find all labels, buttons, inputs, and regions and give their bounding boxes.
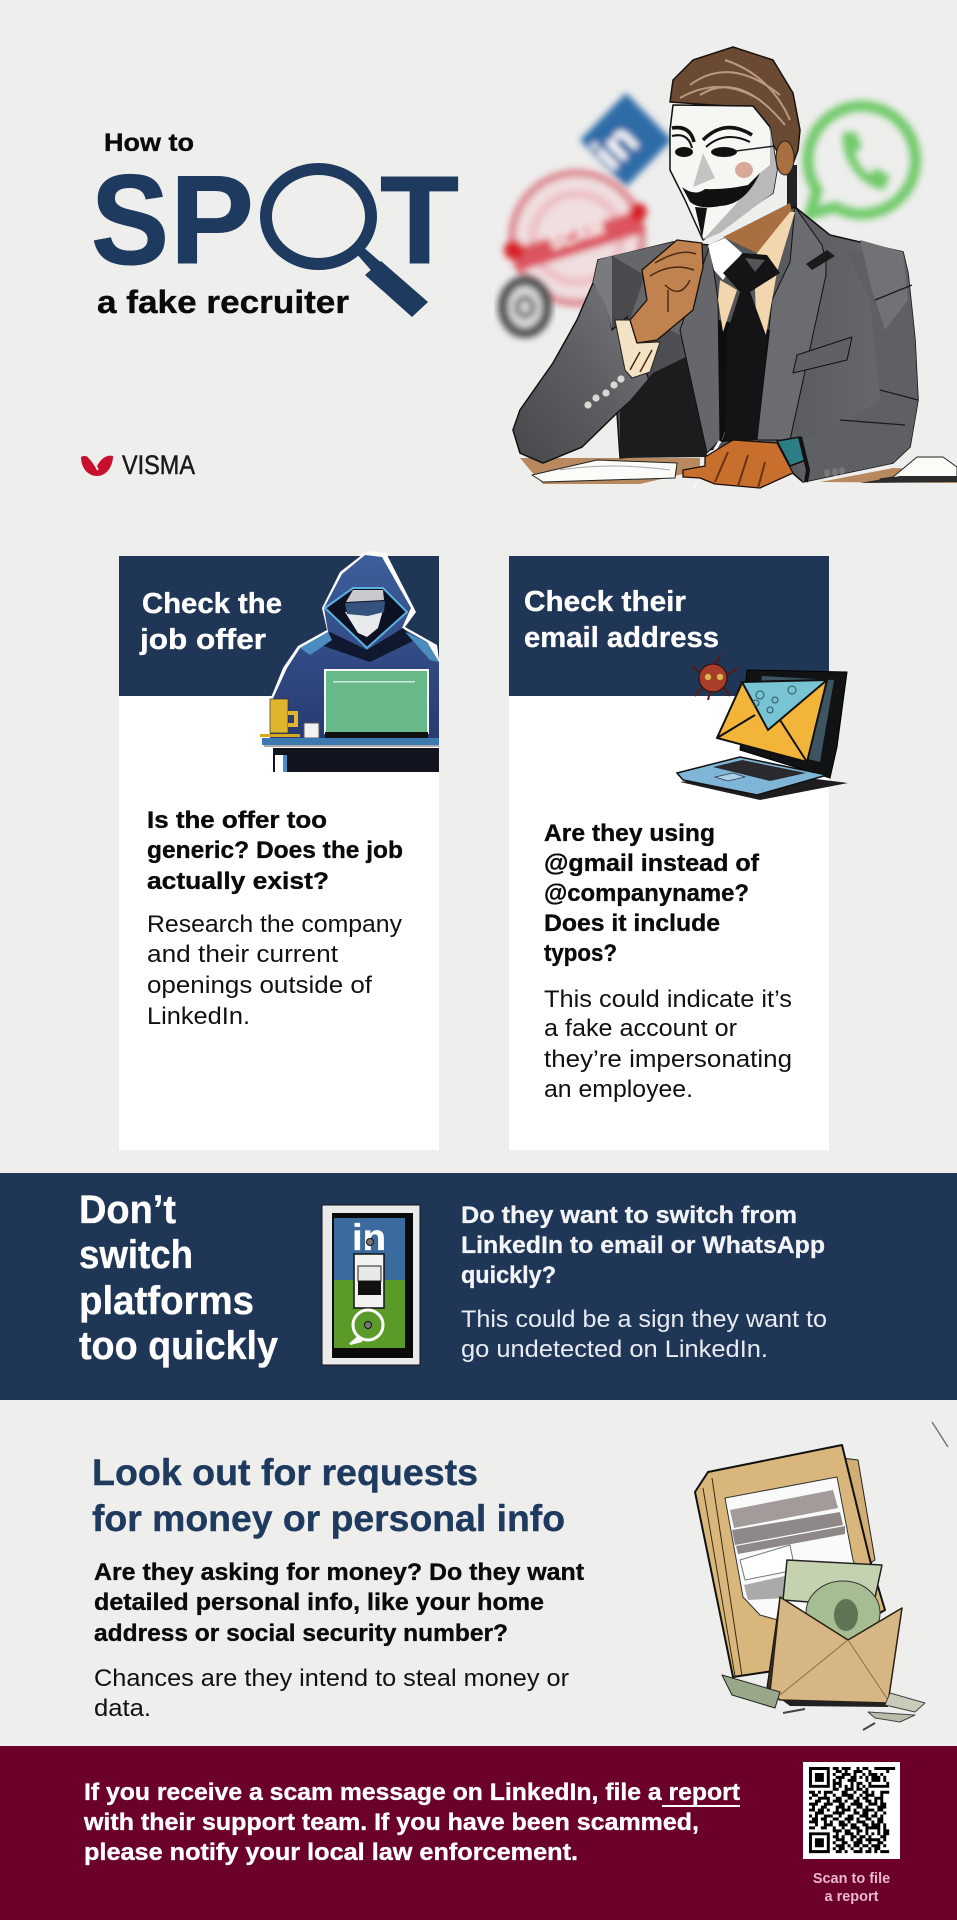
card header: Check their <box>524 586 686 618</box>
QR caption <box>813 1871 890 1905</box>
text: switch question <box>461 1202 825 1289</box>
title: how to spot a fake recruiter: a fake recruiter <box>97 284 349 320</box>
icon: blurred WhatsApp logo <box>808 106 916 214</box>
illustration: hooded hacker at laptop <box>260 551 439 772</box>
title: how to spot a fake recruiter: T <box>380 151 459 290</box>
suit <box>513 207 918 482</box>
sleeve buttons <box>584 375 625 409</box>
mug <box>260 699 300 737</box>
icon: light switch <box>322 1205 420 1365</box>
vest <box>718 320 770 442</box>
raised hand <box>630 240 703 343</box>
panel: hero header <box>81 47 957 489</box>
title: how to spot a fake recruiter: How to <box>104 129 194 157</box>
text: offer advice: openings outside of <box>147 972 372 999</box>
text: email advice: a fake account or <box>544 1015 737 1042</box>
card header <box>509 556 829 696</box>
left lapel <box>680 245 720 453</box>
neck <box>723 203 793 253</box>
text: offer questions: generic? Does the job <box>147 837 403 864</box>
text: email advice: they’re impersonating <box>544 1046 792 1073</box>
lower hand <box>683 440 793 488</box>
text: switch advice: go undetected on LinkedIn. <box>461 1336 768 1363</box>
panel: requests for money or personal info <box>92 1422 948 1730</box>
QR caption: a report <box>824 1889 879 1905</box>
mask <box>670 105 777 240</box>
card header: Check the <box>142 588 282 620</box>
pocket <box>793 337 852 373</box>
text: switch advice: This could be a sign they want to <box>461 1306 827 1333</box>
heading: for money or personal info <box>92 1498 565 1539</box>
icon: blurred LinkedIn logo <box>580 93 672 187</box>
text: offer advice: Research the company <box>147 911 402 938</box>
text: money advice: Chances are they intend to steal money or <box>94 1665 569 1692</box>
text: email questions: Are they using <box>544 820 715 847</box>
text: offer questions: actually exist? <box>147 868 329 895</box>
title: how to spot a fake recruiter: S <box>91 149 169 292</box>
illustration: man in suit holding mask <box>513 47 957 489</box>
heading: Look out for requests <box>92 1452 478 1493</box>
text: switch question: LinkedIn to email or WhatsApp <box>461 1232 825 1259</box>
text: switch question: Do they want to switch from <box>461 1202 797 1229</box>
envelope <box>767 1597 902 1707</box>
right arm highlight <box>790 250 918 482</box>
text: email advice: This could indicate it’s <box>544 986 792 1013</box>
text: email advice: an employee. <box>544 1076 693 1103</box>
text: money questions <box>94 1559 584 1647</box>
QR caption: Scan to file <box>813 1871 890 1887</box>
text: email questions: typos? <box>544 940 617 967</box>
text: offer questions: Is the offer too <box>147 807 327 834</box>
text: money questions: detailed personal info, like your home <box>94 1589 544 1616</box>
text: report instructions <box>83 1779 740 1866</box>
card header: job offer <box>139 624 266 656</box>
text: report instructions: If you receive a scam message on LinkedIn, file a report <box>84 1779 740 1806</box>
pen <box>693 441 720 489</box>
watch <box>777 437 806 466</box>
cuff <box>615 320 660 378</box>
title: how to spot a fake recruiter <box>91 129 459 320</box>
tie <box>723 253 780 440</box>
panel: check the job offer <box>119 551 439 1150</box>
text: switch question: quickly? <box>461 1262 556 1289</box>
right lapel <box>757 207 826 440</box>
text: money questions: Are they asking for money? Do they want <box>94 1559 584 1586</box>
text: switch advice <box>461 1306 827 1363</box>
jacket buttons <box>824 467 845 477</box>
logo: Visma <box>81 450 195 480</box>
heading <box>92 1452 565 1539</box>
money <box>783 1560 882 1645</box>
sleeve <box>513 283 650 463</box>
text: offer advice <box>147 911 402 1030</box>
text: offer advice: LinkedIn. <box>147 1003 250 1030</box>
card header: email address <box>524 622 719 654</box>
heading: switch <box>79 1233 193 1277</box>
panel: don't switch platforms <box>0 1173 957 1400</box>
text: offer questions <box>147 807 403 895</box>
icon: blurred scam stamp: SCAM <box>547 217 607 255</box>
card header <box>119 556 439 696</box>
text: report instructions: with their support team. If you have been scammed, <box>83 1809 699 1836</box>
icon: magnifying glass <box>266 169 428 317</box>
title: how to spot a fake recruiter: P <box>170 151 254 290</box>
text: email questions: @companyname? <box>544 880 749 907</box>
gap between sleeve and torso <box>572 417 619 458</box>
icon: blurred LinkedIn logo: in <box>582 113 648 179</box>
text: email questions: @gmail instead of <box>544 850 760 877</box>
panel: report footer <box>0 1746 957 1920</box>
text: email questions: Does it include <box>544 910 720 937</box>
heading: too quickly <box>79 1324 279 1368</box>
left vest <box>620 350 707 458</box>
ear <box>776 141 794 175</box>
table <box>520 458 700 484</box>
heading <box>79 1188 279 1368</box>
icon: blurred at sign <box>503 281 547 333</box>
text: money advice <box>94 1665 569 1722</box>
text: report instructions: please notify your local law enforcement. <box>84 1839 578 1866</box>
illustration: folder, documents and money <box>695 1422 948 1730</box>
icon: virus <box>692 654 738 700</box>
logo: Visma: VISMA <box>122 450 195 480</box>
text: email advice <box>544 986 792 1103</box>
shirt <box>755 212 795 340</box>
text: money questions: address or social security number? <box>94 1620 508 1647</box>
heading: platforms <box>79 1279 254 1323</box>
QR code <box>803 1762 900 1859</box>
heading: Don’t <box>79 1188 176 1232</box>
text: email questions <box>544 820 760 967</box>
text: money advice: data. <box>94 1695 151 1722</box>
panel: check their email address <box>509 556 848 1150</box>
text: offer advice: and their current <box>147 941 338 968</box>
icon: blurred scam stamp <box>504 173 647 303</box>
hair <box>670 47 800 172</box>
icon: light switch: in <box>352 1217 386 1258</box>
illustration: infected email on laptop <box>677 654 848 800</box>
